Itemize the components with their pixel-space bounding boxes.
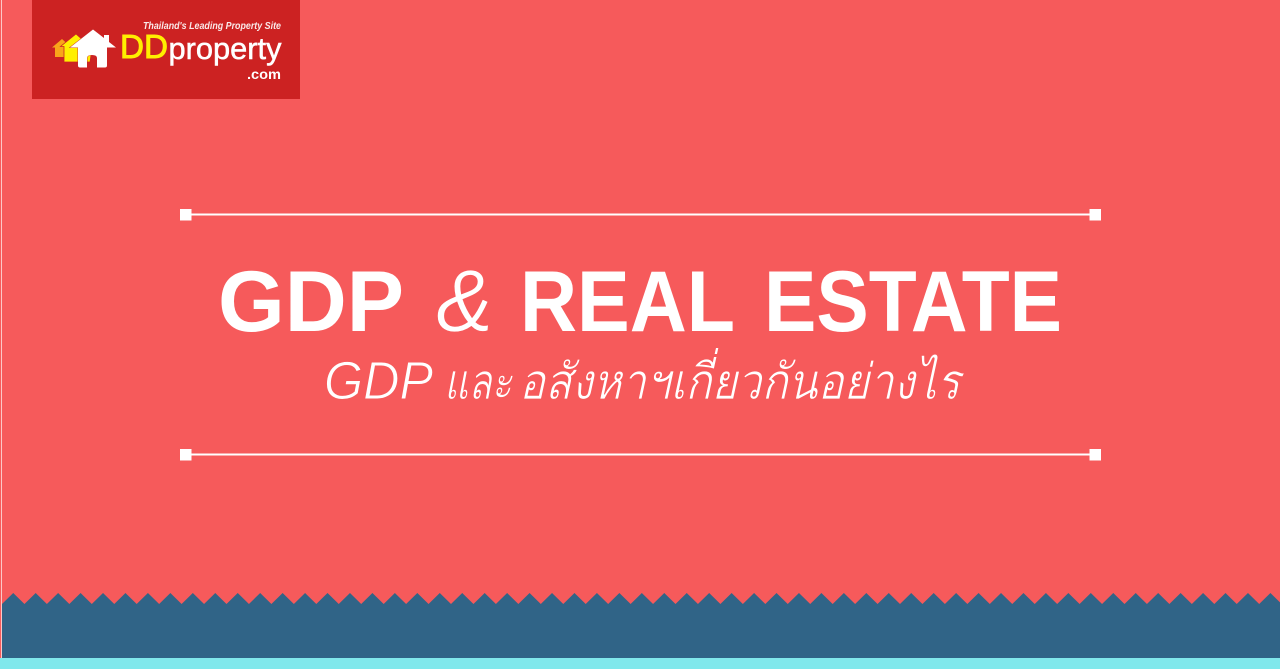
title: ESTATE [764, 254, 1062, 350]
logo wordmark DD: DD [120, 28, 168, 65]
logo wordmark property: property [168, 31, 282, 66]
icon: yellow house [60, 34, 92, 62]
subtitle: และ [444, 354, 514, 410]
bottom rule with end squares [180, 449, 1101, 460]
footer cyan strip [0, 658, 1280, 669]
subtitle [324, 347, 964, 411]
subtitle: อสังหาฯเกี่ยวกันอย่างไร [519, 347, 964, 410]
title ampersand: & [436, 251, 493, 350]
icon: white house [70, 30, 116, 68]
icon: orange house [52, 39, 72, 57]
logo tagline: Thailand's Leading Property Site [143, 20, 281, 32]
logo wordmark .com: .com [247, 66, 281, 82]
logo panel [32, 0, 300, 99]
title [218, 251, 1062, 350]
footer zigzag band [2, 593, 1280, 658]
subtitle: GDP [324, 351, 433, 411]
top rule with end squares [180, 209, 1101, 220]
title: GDP [218, 254, 404, 350]
title: REAL [520, 254, 735, 350]
